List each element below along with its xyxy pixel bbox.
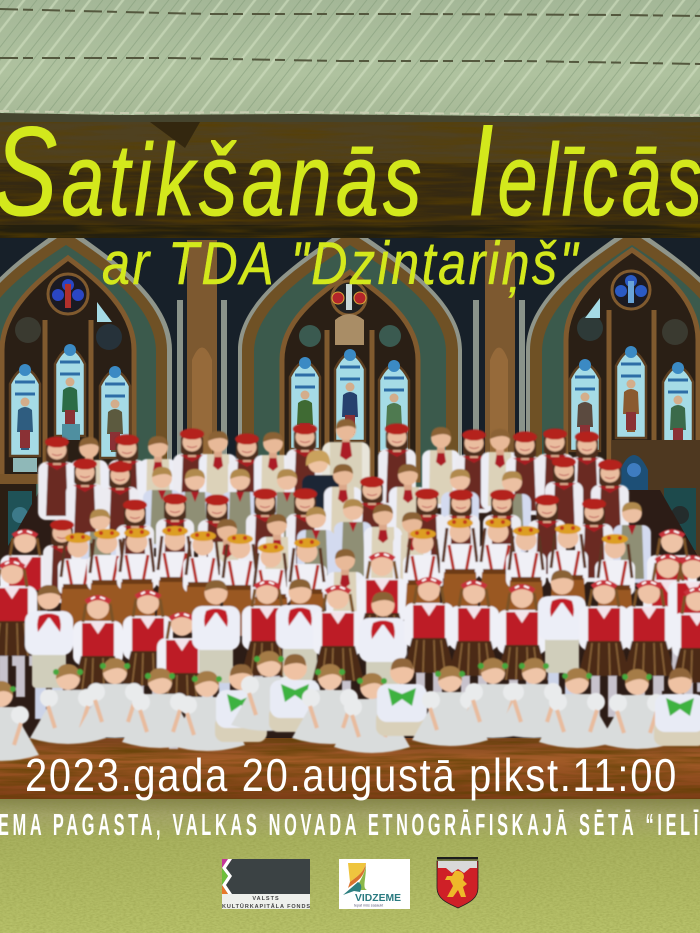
wooden beam [0,122,700,238]
floor [0,732,700,799]
photo: choir group [0,419,700,761]
pillar: left [177,240,227,470]
logo: Valsts Kultūrkapitāla fonds: VALSTS [252,896,280,902]
subtitle: ar TDA "Dzintariņš": ar TDA "Dzintariņš" [102,230,580,297]
lower wood panelling and side windows [0,440,700,564]
arch: right [526,226,700,510]
standing front row [0,562,700,749]
logo: Valsts Kultūrkapitāla fonds: KULTŪRKAPITĀLA FONDS [222,903,310,910]
title: Satikšanās Ielīcās: Satikšanās [0,101,426,242]
background: church interior with arches [0,226,700,564]
third row [81,488,698,666]
stained glass window: left [2,258,134,480]
logo: Valka coat of arms [437,857,478,908]
dark space behind the choir [0,490,700,738]
wreath row [0,512,700,692]
stained glass window: centre [282,272,418,480]
logo: Vidzeme [339,859,410,909]
logo: Valsts Kultūrkapitāla fonds [222,859,310,910]
arch: left [0,226,172,510]
back row [38,419,606,520]
stained glass window: right [566,250,698,480]
background: thatched roof [0,0,700,130]
lawn [0,799,700,933]
arch: centre [238,226,462,510]
sitting children row [0,651,700,761]
second row [66,450,629,560]
logo: Vidzeme: tepat mūs sasaukt [354,904,383,908]
pillar: right [473,240,525,470]
logo: Vidzeme: VIDZEME [355,893,401,904]
